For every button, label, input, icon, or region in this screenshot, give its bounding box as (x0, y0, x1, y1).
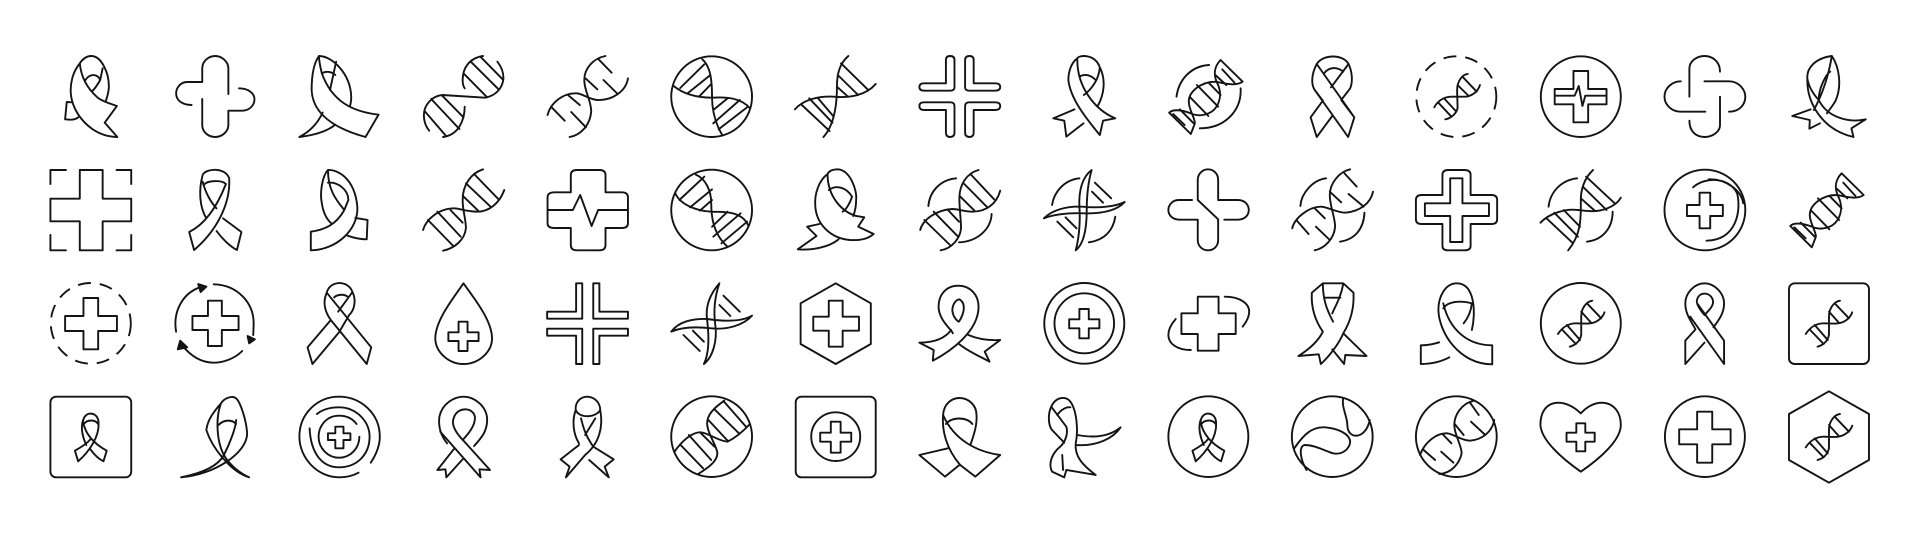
icon: small loop ribbon (919, 286, 1000, 362)
icon: rounded cross with diagonal (1168, 169, 1249, 250)
icon: cross in circle (1665, 396, 1745, 477)
icon: narrow loop ribbon (1685, 283, 1724, 364)
icon: flat top ribbon (1298, 283, 1367, 364)
icon: ribbon in rounded square (50, 397, 131, 477)
icon group: rows 3-4, columns 1-5 (50, 283, 628, 477)
icon: DNA in dashed circle (1416, 56, 1496, 137)
icon group: rows 3-4, columns 6-10 (671, 283, 1249, 477)
icon: DNA with short rungs in circle (1416, 396, 1497, 477)
icon: interlocked cross (1664, 56, 1745, 137)
icon: ribbon with forked tails (561, 397, 614, 477)
icon: DNA filling circle (671, 396, 752, 477)
icon: cross with pulse line (548, 170, 628, 250)
icon: ribbon with right tail (311, 170, 368, 250)
icon: awareness ribbon (308, 283, 371, 364)
icon: cross with corner brackets (50, 170, 131, 250)
icon group: rows 1-2, columns 6-10 (671, 56, 1249, 250)
icon: cross in dashed circle (51, 283, 131, 364)
icon: wide loop ribbon (437, 397, 490, 477)
icon: wide tail ribbon (919, 398, 1000, 477)
icon: circle with pulse cross (1541, 56, 1621, 137)
icon: twisted strands (671, 283, 752, 364)
icon: DNA segment (1790, 173, 1864, 247)
icon: cross with cycle arrows (175, 284, 255, 363)
icon: DNA helix with short rungs (548, 56, 628, 137)
icon group: rows 3-4, columns 11-15 (1292, 283, 1869, 483)
icon: swooping ribbon (299, 56, 379, 137)
icon: ribbon with notched tails (1053, 56, 1115, 137)
icon group: rows 1-2, columns 11-15 (1292, 56, 1866, 250)
icon: DNA with orbit arcs (920, 170, 1000, 250)
icon: twisted strands with arcs (1044, 170, 1125, 250)
icon: ribbon with flat tails (1421, 283, 1492, 364)
icon: cross in double circle (1044, 283, 1124, 364)
icon: crossing slim ribbon (181, 397, 249, 477)
icon: blood drop with cross (435, 283, 492, 364)
icon: DNA with orbit arcs (1169, 60, 1243, 134)
icon: split rounded cross (919, 56, 1000, 137)
icon: ribbon with side tail (65, 56, 117, 137)
icon: DNA helix with rungs (424, 56, 503, 137)
icon: heart with cross (1540, 403, 1621, 472)
icon: circle with wavy strands (1292, 396, 1373, 477)
icon: cross in concentric rings (299, 397, 380, 477)
icon: cross in hexagon (801, 283, 871, 364)
icon: DNA in circle (1541, 283, 1621, 364)
icon: circle cross with inner arcs (1664, 170, 1745, 250)
icon: sweeping ribbon (1049, 398, 1121, 477)
icon: DNA helix with rungs (423, 169, 504, 251)
icon: DNA helix (795, 56, 876, 137)
icon: cross with side arcs (1168, 297, 1249, 351)
icon: DNA in circle (671, 170, 752, 250)
icon: split square cross (547, 283, 628, 364)
icon: double outline cross (1416, 170, 1497, 250)
icon: classic ribbon (189, 170, 241, 250)
icon: flowing ribbon (1792, 56, 1866, 137)
icon: DNA with orbit arcs (1540, 170, 1621, 250)
icon: ribbon with jagged tails (798, 169, 874, 250)
icon: DNA in hexagon (1789, 391, 1869, 483)
icon: DNA with orbit arcs (1292, 169, 1373, 250)
icon: circle cross in rounded square (796, 397, 876, 477)
icon: open rounded cross (176, 56, 254, 137)
icon: DNA in circle (671, 56, 752, 137)
icon group: rows 1-2, columns 1-5 (50, 56, 628, 251)
icon: awareness ribbon (1311, 56, 1354, 137)
icon: DNA in rounded square (1789, 283, 1869, 364)
icon: ribbon in circle (1168, 396, 1248, 477)
